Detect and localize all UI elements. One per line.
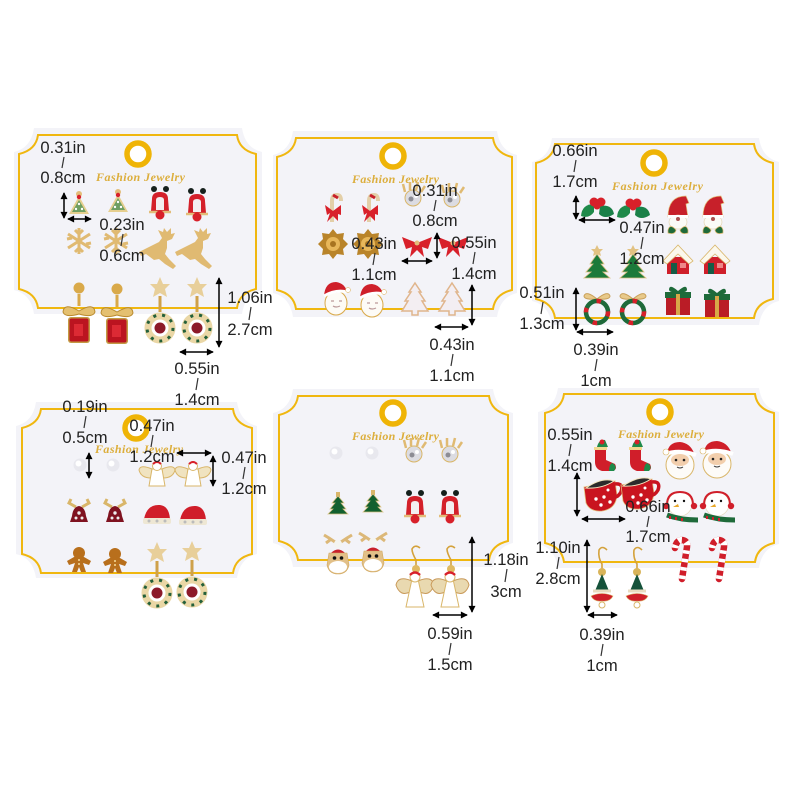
earrings: small trees	[69, 189, 128, 214]
earrings: santa	[324, 282, 386, 317]
label 0.47in / 1.2cm	[619, 218, 665, 268]
label 0.39in / 1cm: 1cm	[586, 656, 618, 675]
label 0.55in / 1.4cm: 0.55in	[547, 425, 593, 444]
earrings: angels	[139, 462, 211, 486]
label 1.06in / 2.7cm: 2.7cm	[227, 320, 273, 339]
arrows	[433, 537, 472, 615]
card backing	[532, 138, 779, 325]
label 1.18in / 3cm	[483, 550, 529, 601]
label 0.51in / 1.3cm	[519, 283, 565, 333]
gold border	[279, 396, 508, 560]
label 0.55in / 1.4cm: 1.4cm	[547, 456, 593, 475]
earrings: bells	[404, 490, 461, 524]
panel: earring card 3	[532, 138, 779, 325]
brand text: Fashion Jewelry	[611, 179, 704, 193]
label 0.55in / 1.4cm: 1.4cm	[451, 264, 497, 283]
earrings: large santa	[663, 441, 733, 479]
label 1.10in / 2.8cm	[535, 538, 581, 588]
label 0.43in / 1.1cm: 1.1cm	[429, 366, 475, 385]
panel: earring card 4	[16, 402, 257, 606]
label 0.19in / 0.5cm	[62, 397, 108, 447]
card backing	[273, 389, 513, 567]
earrings: star wreaths	[144, 541, 205, 606]
dimensions: card 5	[427, 537, 529, 674]
hanging hole ring	[382, 145, 404, 167]
label 0.39in / 1cm	[579, 625, 625, 675]
earrings: red bows	[402, 237, 468, 257]
earrings: reindeer	[139, 228, 212, 269]
label 0.47in / 1.2cm, height: 0.47in	[221, 448, 267, 467]
hanging hole ring	[127, 143, 149, 165]
panel: earring card 5	[273, 389, 513, 607]
label 0.66in / 1.7cm: 1.7cm	[625, 527, 671, 546]
brand text: Fashion Jewelry	[351, 429, 440, 443]
label 0.55in / 1.4cm	[174, 359, 220, 409]
label 0.31in / 0.8cm	[40, 138, 86, 187]
hanging hole ring	[649, 401, 671, 423]
label 0.31in / 0.8cm	[412, 181, 458, 230]
earrings: santa hats	[143, 505, 207, 525]
label 0.31in / 0.8cm: 0.8cm	[412, 211, 458, 230]
dimensions: card 6	[535, 425, 671, 675]
label 0.43in / 1.1cm: 1.1cm	[351, 265, 397, 284]
label 0.47in / 1.2cm: 0.47in	[619, 218, 665, 237]
label 0.39in / 1cm: 0.39in	[573, 340, 619, 359]
earrings: star wreaths	[147, 277, 210, 341]
gold border	[545, 394, 774, 562]
earrings: pearls	[330, 446, 378, 460]
earrings: candy canes with bows	[325, 195, 378, 222]
label 0.51in / 1.3cm: 1.3cm	[519, 314, 565, 333]
earrings: holly	[581, 198, 650, 218]
earrings: crystal reindeer	[403, 182, 464, 207]
label 0.47in / 1.2cm, height: 1.2cm	[221, 479, 267, 498]
label 0.59in / 1.5cm	[427, 624, 473, 674]
earrings: gingerbread men	[67, 547, 127, 573]
label 1.10in / 2.8cm: 2.8cm	[535, 569, 581, 588]
arrows	[402, 233, 472, 327]
panel: earring card 1	[14, 128, 262, 344]
label 0.43in / 1.1cm: 0.43in	[351, 234, 397, 253]
earrings: hook trees	[591, 548, 648, 608]
arrows	[64, 193, 219, 352]
earrings: reindeer faces	[324, 533, 387, 574]
panel: earring card 2	[273, 131, 517, 317]
label 0.23in / 0.6cm: 0.23in	[99, 215, 145, 234]
earrings: gifts	[665, 287, 730, 317]
earrings: red gems with bows	[63, 282, 133, 344]
card backing	[16, 402, 257, 578]
label 1.06in / 2.7cm	[227, 288, 273, 339]
label 1.18in / 3cm: 3cm	[490, 582, 522, 601]
card backing	[273, 131, 517, 317]
label 0.43in / 1.1cm: 0.43in	[429, 335, 475, 354]
label 0.23in / 0.6cm	[99, 215, 145, 265]
arrows	[576, 196, 615, 332]
earrings: pearls	[74, 458, 120, 472]
label 0.66in / 1.7cm: 0.66in	[552, 141, 598, 160]
arrows	[89, 453, 213, 486]
gold border	[277, 138, 512, 309]
earrings: gnomes	[668, 196, 724, 234]
earrings: green trees with stars	[584, 245, 646, 278]
earrings: stockings	[594, 440, 651, 471]
card backing	[14, 128, 262, 314]
label 0.31in / 0.8cm: 0.31in	[40, 138, 86, 157]
label 0.55in / 1.4cm: 0.55in	[451, 233, 497, 252]
label 0.55in / 1.4cm	[451, 233, 497, 283]
label 0.47in / 1.2cm, width: 1.2cm	[129, 447, 175, 466]
brand text: Fashion Jewelry	[617, 427, 705, 441]
brand text: Fashion Jewelry	[351, 172, 440, 186]
hanging hole ring	[125, 417, 147, 439]
earrings: cups	[584, 478, 659, 511]
label 0.19in / 0.5cm: 0.19in	[62, 397, 108, 416]
earrings: pink trees	[402, 283, 465, 315]
earrings: hook angels	[396, 546, 469, 607]
label 0.47in / 1.2cm, width	[129, 416, 175, 466]
dimensions: card 1	[40, 138, 273, 409]
label 0.59in / 1.5cm: 0.59in	[427, 624, 473, 643]
dimensions: card 4	[62, 397, 267, 498]
earrings: crystal reindeer	[404, 438, 462, 462]
label 0.31in / 0.8cm: 0.8cm	[40, 168, 86, 187]
earrings: green trees	[328, 490, 383, 514]
earrings: houses	[663, 245, 730, 274]
label 1.06in / 2.7cm: 1.06in	[227, 288, 273, 307]
gold border	[19, 135, 256, 308]
label 0.66in / 1.7cm: 1.7cm	[552, 172, 598, 191]
label 0.66in / 1.7cm	[552, 141, 598, 191]
label 0.66in / 1.7cm: 0.66in	[625, 497, 671, 516]
hanging hole ring	[643, 152, 665, 174]
brand text: Fashion Jewelry	[94, 442, 184, 456]
label 0.43in / 1.1cm	[351, 234, 397, 284]
panel: earring card 6	[538, 388, 779, 608]
earrings: dark red reindeer bells	[69, 499, 125, 522]
brand text: Fashion Jewelry	[95, 170, 186, 184]
dimensions: card 3	[519, 141, 665, 390]
earrings: snowflakes	[67, 228, 128, 254]
label 0.39in / 1cm	[573, 340, 619, 390]
label 0.55in / 1.4cm: 0.55in	[174, 359, 220, 378]
label 0.23in / 0.6cm: 0.6cm	[99, 246, 145, 265]
earrings: bells	[149, 186, 208, 222]
label 1.18in / 3cm: 1.18in	[483, 550, 529, 569]
earrings: gold bows	[318, 229, 383, 259]
label 0.31in / 0.8cm: 0.31in	[412, 181, 458, 200]
dimensions: card 2	[351, 181, 497, 385]
label 0.59in / 1.5cm: 1.5cm	[427, 655, 473, 674]
label 0.39in / 1cm: 0.39in	[579, 625, 625, 644]
label 0.43in / 1.1cm	[429, 335, 475, 385]
label 0.39in / 1cm: 1cm	[580, 371, 612, 390]
earrings: candy canes	[675, 540, 724, 579]
earrings: snowmen	[663, 492, 735, 521]
earrings: wreaths	[584, 294, 646, 323]
hanging hole ring	[382, 402, 404, 424]
label 0.47in / 1.2cm: 1.2cm	[619, 249, 665, 268]
label 0.19in / 0.5cm: 0.5cm	[62, 428, 108, 447]
arrows	[577, 473, 625, 615]
label 0.47in / 1.2cm, height	[221, 448, 267, 498]
label 0.55in / 1.4cm: 1.4cm	[174, 390, 220, 409]
label 0.55in / 1.4cm	[547, 425, 593, 475]
label 0.47in / 1.2cm, width: 0.47in	[129, 416, 175, 435]
label 0.66in / 1.7cm	[625, 497, 671, 546]
gold border	[536, 144, 773, 318]
label 1.10in / 2.8cm: 1.10in	[535, 538, 581, 557]
label 0.51in / 1.3cm: 0.51in	[519, 283, 565, 302]
gold border	[22, 409, 252, 573]
card backing	[538, 388, 779, 568]
